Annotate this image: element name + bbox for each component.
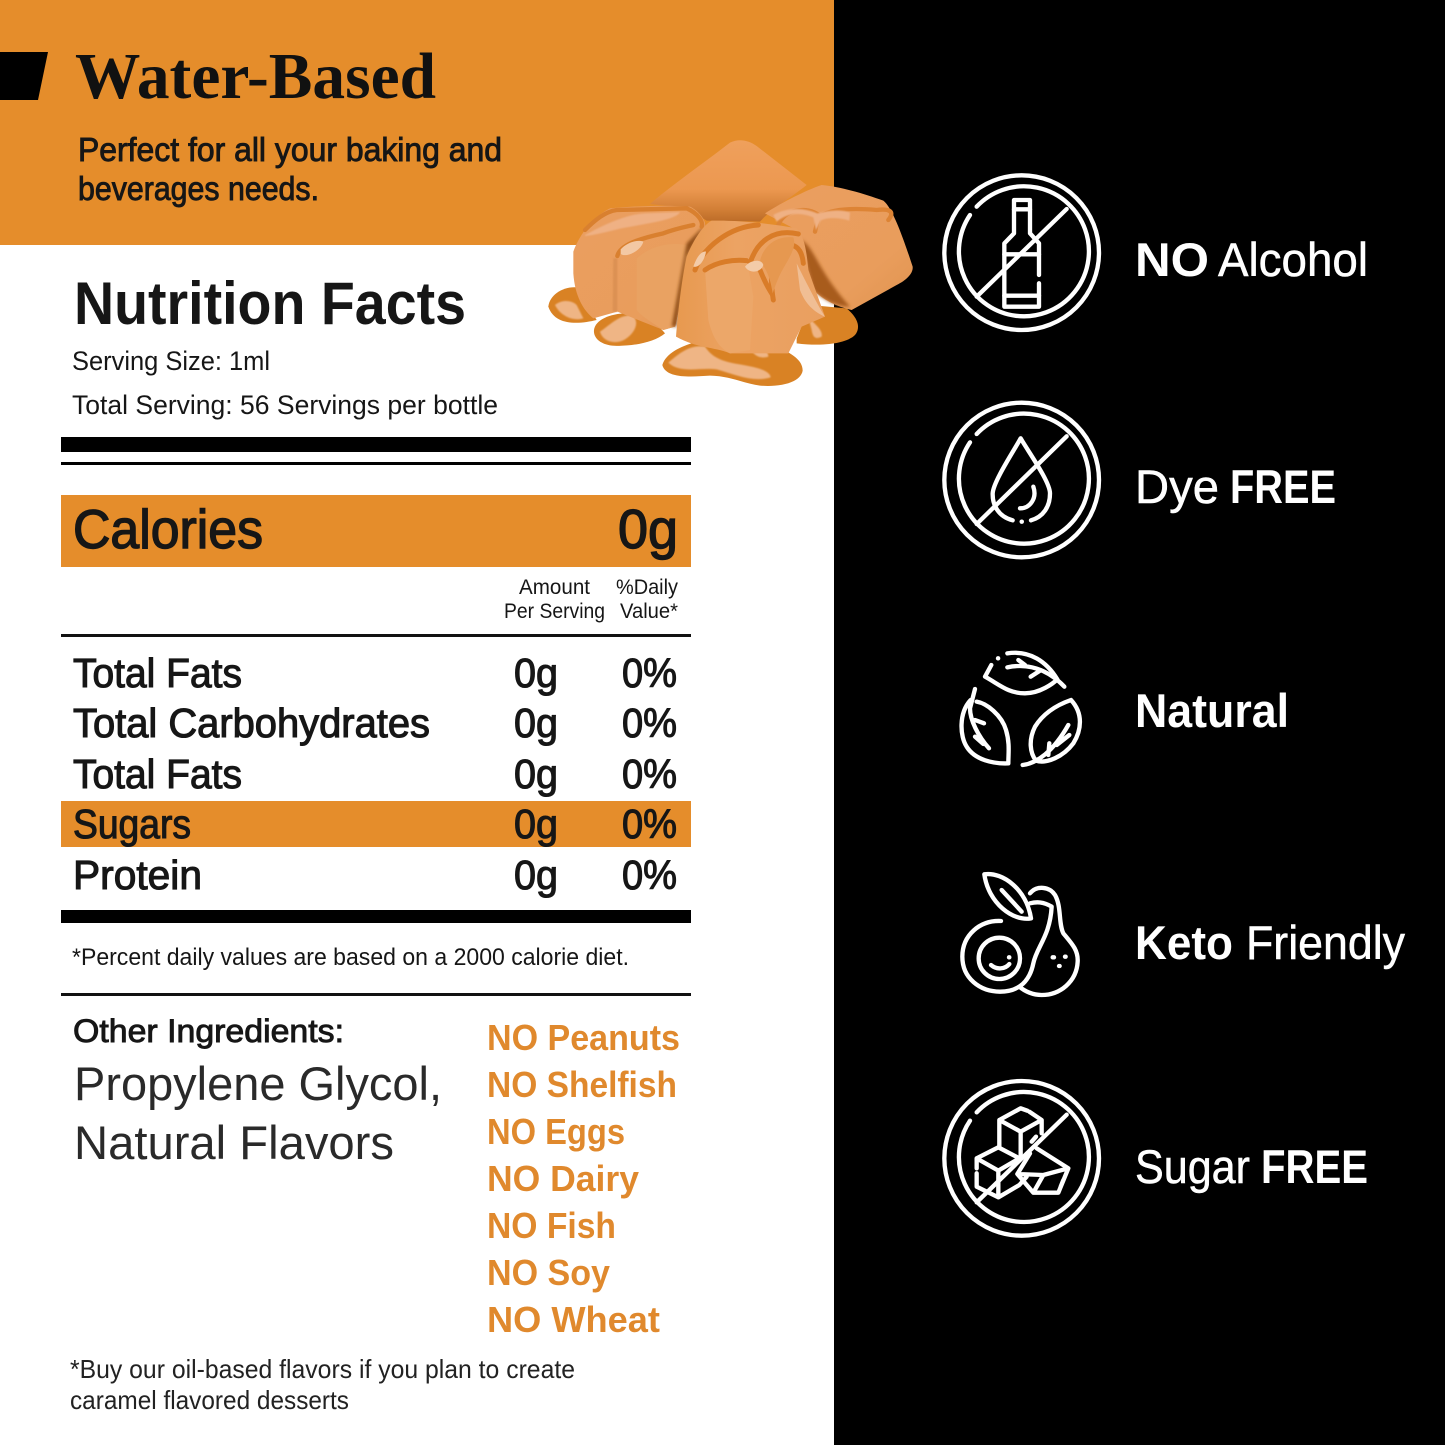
icon: natural leaves bbox=[962, 653, 1080, 765]
allergen list: NO Soy bbox=[487, 1252, 610, 1293]
label: dye free bbox=[1135, 460, 1336, 513]
label: no alcohol bbox=[1135, 233, 1368, 286]
allergen list: NO Eggs bbox=[487, 1111, 625, 1152]
label: dye free: Dye bbox=[1135, 460, 1219, 513]
row: sugars bbox=[73, 801, 677, 847]
label: sugar free bbox=[1135, 1140, 1368, 1193]
label: sugar free: FREE bbox=[1261, 1140, 1368, 1193]
heading: nutrition facts: Nutrition Facts bbox=[74, 270, 466, 337]
row: protein: Protein bbox=[73, 852, 202, 898]
serving info: Serving Size: 1ml bbox=[72, 346, 270, 376]
column headers: Value* bbox=[620, 600, 678, 623]
row: total fats: Total Fats bbox=[73, 650, 242, 696]
row: total fats 2: 0% bbox=[622, 751, 677, 797]
footnote: oil-based flavors: *Buy our oil-based flavors if you plan to create bbox=[70, 1354, 575, 1384]
label: no alcohol: Alcohol bbox=[1218, 233, 1368, 286]
row: protein bbox=[73, 852, 677, 898]
row: total carbohydrates: 0% bbox=[622, 700, 677, 746]
icon: keto avocado bbox=[962, 874, 1078, 995]
icon: sugar free bbox=[944, 1081, 1099, 1236]
left cube bbox=[573, 206, 705, 330]
row: total carbohydrates: Total Carbohydrates bbox=[73, 700, 430, 746]
front cube bbox=[676, 221, 825, 353]
image: caramel cubes bbox=[548, 140, 913, 386]
background: black panel bbox=[834, 0, 1445, 1445]
row: total carbohydrates: 0g bbox=[514, 700, 558, 746]
calories bar bbox=[61, 495, 691, 567]
subtitle: beverages needs. bbox=[78, 170, 319, 207]
label: keto friendly: Friendly bbox=[1246, 916, 1405, 969]
calories bar: 0g bbox=[618, 498, 678, 560]
background: white panel bbox=[0, 0, 834, 1445]
row: total fats: 0g bbox=[514, 650, 558, 696]
column headers: %Daily bbox=[616, 576, 678, 599]
footnote: oil-based flavors: caramel flavored desserts bbox=[70, 1385, 349, 1415]
sugars highlight bbox=[61, 801, 691, 847]
column headers bbox=[504, 576, 678, 623]
sauce on right cube bbox=[778, 209, 891, 232]
footnote: daily values: *Percent daily values are based on a 2000 calorie diet. bbox=[72, 944, 629, 971]
row: total fats 2: Total Fats bbox=[73, 751, 242, 797]
subtitle: Perfect for all your baking and bbox=[78, 131, 502, 168]
other ingredients: Natural Flavors bbox=[74, 1116, 394, 1169]
caramel puddles bbox=[548, 287, 858, 386]
icon: dye free bbox=[944, 403, 1099, 557]
serving info: Total Serving: 56 Servings per bottle bbox=[72, 390, 498, 420]
black title marker bbox=[0, 52, 48, 100]
sauce on left cube bbox=[585, 208, 702, 256]
label: keto friendly bbox=[1135, 916, 1405, 969]
puddle highlights bbox=[555, 301, 822, 379]
label: no alcohol: NO bbox=[1135, 233, 1209, 286]
other ingredients: Propylene Glycol, bbox=[74, 1057, 442, 1110]
row: sugars: 0% bbox=[622, 801, 677, 847]
label: dye free: FREE bbox=[1230, 460, 1336, 513]
allergen list bbox=[487, 1017, 680, 1340]
icon: no alcohol bbox=[944, 175, 1099, 330]
row: total fats: 0% bbox=[622, 650, 677, 696]
crevice shadow bbox=[672, 225, 705, 327]
subtitle bbox=[78, 131, 502, 207]
row: total carbohydrates bbox=[73, 700, 677, 746]
other ingredients: Other Ingredients: bbox=[73, 1013, 344, 1049]
label: keto friendly: Keto bbox=[1135, 916, 1233, 969]
title: Water-Based bbox=[75, 40, 436, 113]
allergen list: NO Wheat bbox=[487, 1299, 660, 1340]
row: protein: 0% bbox=[622, 852, 677, 898]
other ingredients bbox=[73, 1013, 442, 1169]
sauce on front cube bbox=[695, 225, 803, 300]
serving info bbox=[72, 346, 498, 420]
row: protein: 0g bbox=[514, 852, 558, 898]
allergen list: NO Shelfish bbox=[487, 1064, 677, 1105]
row: sugars: 0g bbox=[514, 801, 558, 847]
nutrient table bbox=[61, 650, 691, 898]
column headers: Per Serving bbox=[504, 600, 605, 623]
row: total fats bbox=[73, 650, 677, 696]
right cube bbox=[765, 185, 913, 310]
allergen list: NO Fish bbox=[487, 1205, 616, 1246]
row: total fats 2: 0g bbox=[514, 751, 558, 797]
footnote: oil-based flavors bbox=[70, 1354, 575, 1415]
column headers: Amount bbox=[519, 576, 590, 599]
right cube shadow bbox=[800, 240, 850, 307]
row: sugars: Sugars bbox=[73, 801, 191, 847]
label: natural: Natural bbox=[1135, 684, 1289, 737]
panel: orange header bbox=[0, 0, 834, 245]
label: sugar free: Sugar bbox=[1135, 1140, 1250, 1193]
allergen list: NO Peanuts bbox=[487, 1017, 680, 1058]
back cube bbox=[650, 140, 807, 222]
calories bar: Calories bbox=[73, 498, 263, 560]
row: total fats 2 bbox=[73, 751, 677, 797]
allergen list: NO Dairy bbox=[487, 1158, 639, 1199]
